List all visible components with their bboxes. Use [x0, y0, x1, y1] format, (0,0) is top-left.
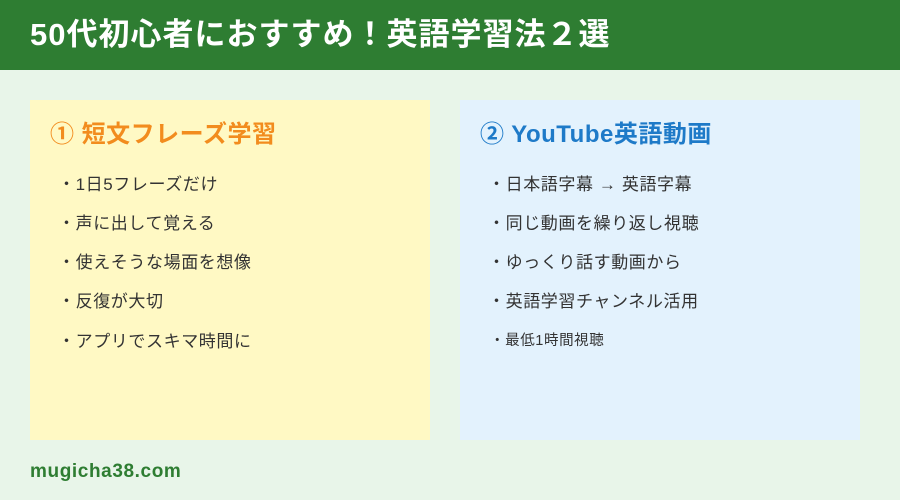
panel: short phrase study: ・使えそうな場面を想像 — [58, 253, 252, 272]
panel: short phrase study — [30, 100, 430, 440]
panel: YouTube videos: ・最低1時間視聴 — [490, 333, 604, 349]
title: 50代初心者におすすめ！英語学習法２選 — [30, 17, 610, 52]
list items — [488, 175, 699, 349]
list items — [58, 175, 252, 351]
panel: short phrase study: ・アプリでスキマ時間に — [58, 332, 252, 351]
panel: YouTube videos: ・同じ動画を繰り返し視聴 — [488, 214, 699, 233]
panel: YouTube videos — [460, 100, 860, 440]
footer: mugicha38.com — [30, 461, 181, 482]
heading: YouTube: ② YouTube英語動画 — [480, 121, 712, 148]
panel: YouTube videos: ・日本語字幕 → 英語字幕 — [488, 175, 692, 194]
header — [0, 0, 900, 70]
panel: YouTube videos: ・英語学習チャンネル活用 — [488, 292, 699, 311]
heading: short phrase: ① 短文フレーズ学習 — [50, 121, 276, 148]
panel: YouTube videos: ・ゆっくり話す動画から — [488, 253, 682, 272]
panel: short phrase study: ・1日5フレーズだけ — [58, 175, 218, 194]
panel: short phrase study: ・声に出して覚える — [58, 214, 215, 233]
panel: short phrase study: ・反復が大切 — [58, 292, 164, 311]
